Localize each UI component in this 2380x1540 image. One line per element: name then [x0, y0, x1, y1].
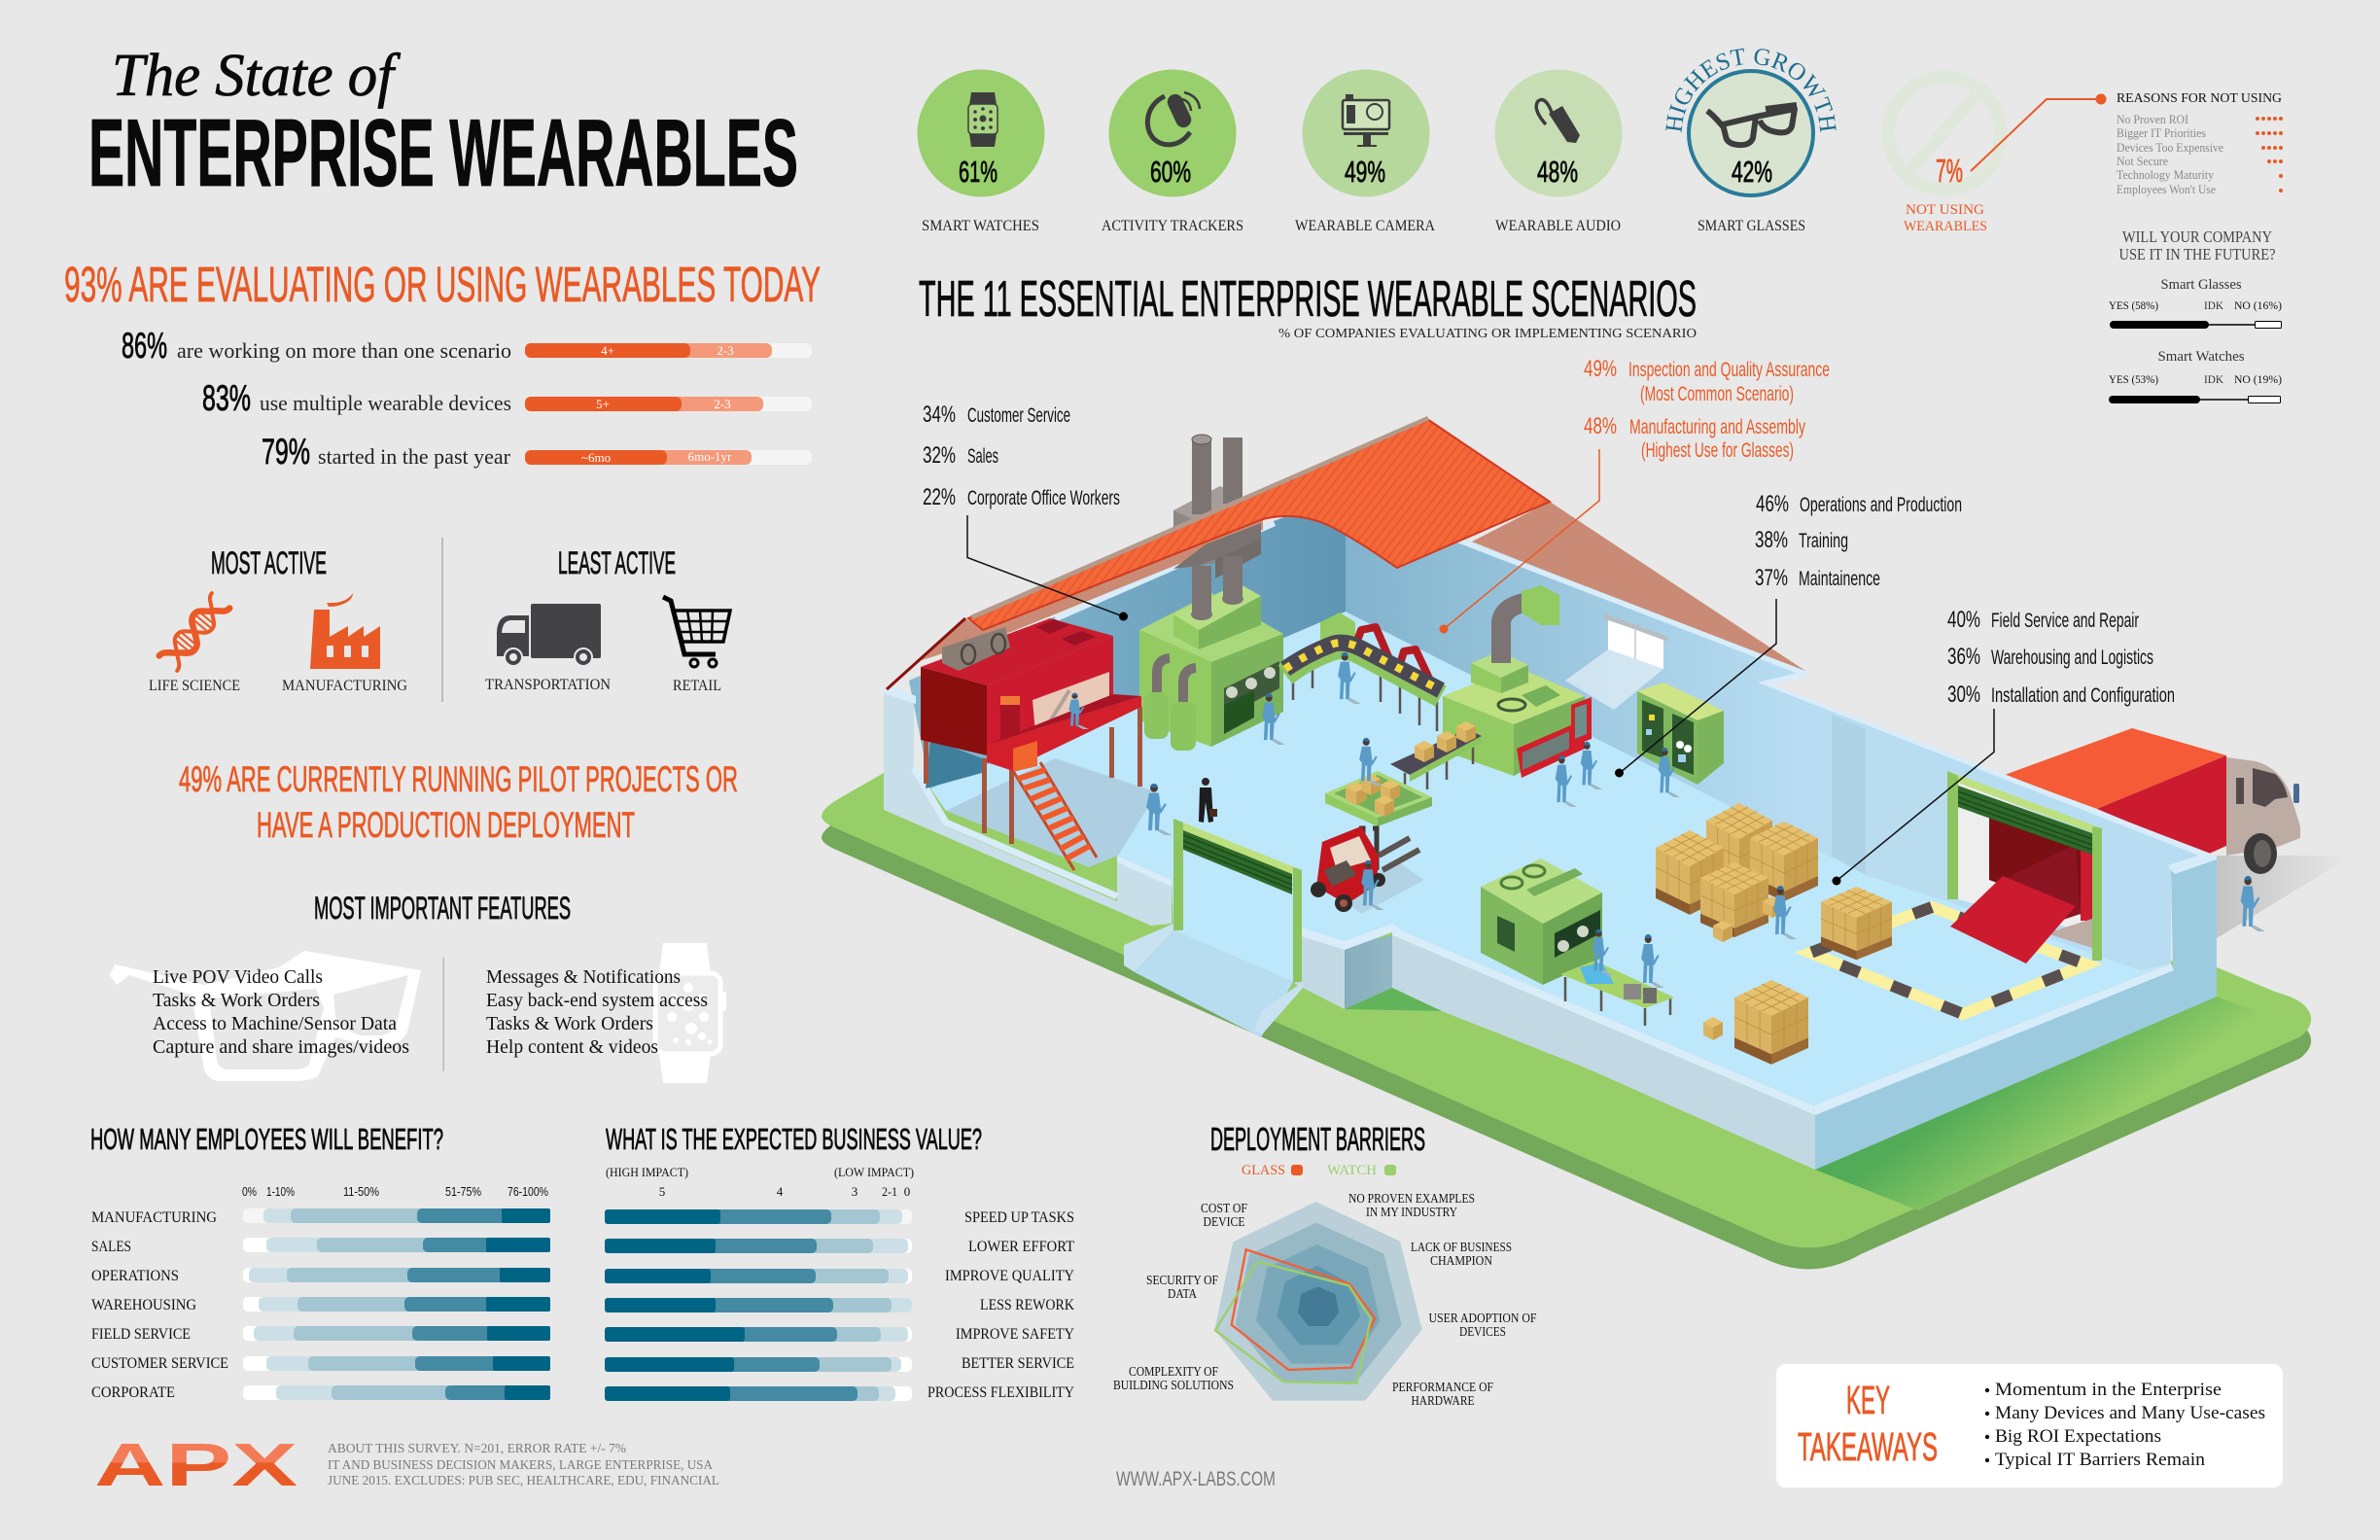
radar labels: CHAMPION	[1430, 1253, 1492, 1268]
back left wall	[909, 494, 1346, 788]
chart: smart glasses future use: YES (58%)	[2109, 298, 2158, 312]
radar labels: COMPLEXITY OF	[1129, 1364, 1218, 1379]
panel: reasons for not using: Not Secure	[2117, 154, 2168, 168]
scenario group: inspection and manufacturing: Manufacturing and Assembly	[1629, 416, 1805, 438]
box tray	[1325, 771, 1432, 826]
device: wearable audio: 48%	[1537, 155, 1578, 189]
right loading door	[1947, 771, 2102, 961]
device: smart watches: 61%	[959, 155, 998, 189]
chart: expected business value: LOWER EFFORT	[968, 1239, 1074, 1255]
panel: reasons for not using: Bigger IT Priorities	[2117, 125, 2206, 140]
scenario group: operations training maintenance: 37%	[1755, 565, 1788, 591]
chart: smart glasses future use: NO (16%)	[2234, 298, 2282, 312]
floor	[930, 612, 2171, 1105]
exhaust pipes and collar	[1173, 435, 1261, 578]
scenario group: field warehousing installation: Field Service and Repair	[1991, 610, 2139, 632]
chart: expected business value: (LOW IMPACT)	[834, 1165, 914, 1179]
machine 2	[1443, 585, 1592, 778]
red roof edge	[887, 618, 965, 689]
small conveyor with boxes	[1390, 721, 1482, 799]
chart: smart glasses future use: Smart Glasses	[2160, 277, 2242, 293]
panel: key takeaways: TAKEAWAYS	[1798, 1424, 1938, 1469]
orange staircase	[1013, 741, 1097, 870]
chart: smart watches future use	[2109, 349, 2282, 403]
scenario group: inspection and manufacturing: (Most Common Scenario)	[1640, 383, 1794, 405]
scenario group: operations training maintenance	[1615, 491, 1962, 778]
bars: employees	[243, 1208, 550, 1400]
scenario group: inspection and manufacturing: (Highest Use for Glasses)	[1641, 439, 1794, 462]
panel: key takeaways: Typical IT Barriers Remain	[1995, 1450, 2206, 1470]
device: activity trackers: ACTIVITY TRACKERS	[1102, 218, 1243, 234]
chart: smart watches future use: IDK	[2204, 372, 2223, 386]
stat: 79 percent: started in the past year	[318, 444, 511, 469]
stack collar lower and pipes	[1173, 523, 1261, 620]
title	[88, 43, 798, 206]
stat: 79 percent: 6mo-1yr	[688, 449, 732, 464]
label: manufacturing: MANUFACTURING	[282, 678, 407, 694]
survey note: ABOUT THIS SURVEY. N=201, ERROR RATE +/- 7%	[328, 1442, 626, 1456]
scenario group: field warehousing installation: 40%	[1947, 607, 1980, 633]
scenario group: operations training maintenance: 46%	[1756, 491, 1789, 517]
chart: expected business value: SPEED UP TASKS	[964, 1209, 1074, 1226]
chart: smart watches future use: YES (53%)	[2109, 372, 2158, 386]
stat: 86 percent: 2-3	[717, 343, 734, 358]
chart: smart glasses future use: IDK	[2204, 298, 2223, 312]
label: retail: RETAIL	[673, 678, 721, 694]
control cabinet	[1637, 682, 1724, 785]
chart: how many employees will benefit: 11-50%	[343, 1184, 379, 1199]
text: watch feature list: Tasks & Work Orders	[486, 1013, 653, 1034]
chart: expected business value: WHAT IS THE EXPECTED BUSINESS VALUE?	[606, 1122, 982, 1156]
chart: how many employees will benefit: OPERATIONS	[91, 1268, 179, 1284]
loading ramp	[1124, 924, 1303, 1037]
chart: how many employees will benefit: CUSTOMER SERVICE	[91, 1355, 228, 1372]
chart: how many employees will benefit: HOW MANY EMPLOYEES WILL BENEFIT?	[90, 1122, 443, 1156]
heading: 93 percent evaluating: 93% ARE EVALUATING OR USING WEARABLES TODAY	[64, 257, 821, 312]
device: activity trackers: 60%	[1150, 155, 1191, 189]
factory roof	[968, 419, 1550, 630]
icon: factory	[310, 593, 380, 669]
conveyor with legs	[1285, 643, 1441, 731]
legend: glass and watch: GLASS	[1242, 1163, 1285, 1178]
device: wearable camera: WEARABLE CAMERA	[1295, 218, 1436, 234]
device: not using wearables: WEARABLES	[1904, 219, 1987, 234]
chart: expected business value: 2-1	[882, 1184, 897, 1199]
chart: expected business value: 5	[659, 1184, 665, 1199]
heading: pilot projects: 49% ARE CURRENTLY RUNNING PILOT PROJECTS OR	[179, 759, 738, 799]
icon: shopping cart	[663, 597, 730, 667]
radar labels: SECURITY OF	[1146, 1273, 1218, 1287]
stat: 83 percent: use multiple wearable devices	[260, 391, 511, 415]
title: The State of	[112, 43, 402, 109]
panel: most active industries: MOST ACTIVE	[211, 545, 327, 580]
work table	[1560, 961, 1674, 1026]
brown roof underside	[887, 502, 1805, 689]
device: smart watches	[918, 70, 1044, 234]
truck shadow on ground	[2217, 856, 2353, 938]
radar polygons	[1214, 1202, 1422, 1401]
scenario group: customer service sales corporate: 32%	[923, 442, 956, 469]
stat: 79 percent	[262, 432, 812, 472]
chart: deployment barriers radar: DEPLOYMENT BARRIERS	[1210, 1121, 1425, 1157]
adoption stat rows with progress bars	[122, 326, 812, 472]
scenario group: field warehousing installation: 30%	[1947, 682, 1980, 708]
website url: WWW.APX-LABS.COM	[1116, 1468, 1276, 1490]
side wing wall	[884, 686, 1172, 926]
panel: least active industries	[485, 545, 730, 694]
chart: how many employees will benefit: 76-100%	[508, 1184, 548, 1199]
text: watch feature list: Help content & videos	[486, 1036, 658, 1058]
chart: expected business value: IMPROVE SAFETY	[956, 1326, 1074, 1343]
device: wearable camera: 49%	[1345, 155, 1385, 189]
stat: 83 percent: 83%	[202, 378, 251, 418]
heading: pilot projects	[179, 759, 738, 845]
left loading door	[1173, 819, 1302, 982]
illustration: isometric factory	[822, 416, 2353, 1269]
back right wall	[1346, 494, 2216, 970]
scenario group: inspection and manufacturing: 49%	[1584, 356, 1617, 382]
front left wall exterior	[1295, 924, 1815, 1170]
label: transportation: TRANSPORTATION	[485, 677, 611, 693]
bars: business value	[605, 1209, 912, 1401]
text: glasses feature list: Live POV Video Calls	[153, 966, 323, 988]
pallet stacks	[1656, 803, 1892, 1065]
radar labels: DATA	[1168, 1286, 1197, 1301]
radar labels	[1113, 1191, 1537, 1408]
radar labels: COST OF	[1201, 1201, 1247, 1215]
panel: reasons for not using: Technology Maturity	[2117, 167, 2214, 182]
chart: how many employees will benefit: 51-75%	[445, 1184, 481, 1199]
green machine 1	[1139, 579, 1283, 751]
panel: reasons for not using: Devices Too Expensive	[2117, 140, 2223, 155]
device: smart glasses: 42%	[1732, 155, 1772, 189]
device: not using wearables: NOT USING	[1906, 202, 1984, 218]
panel: reasons for not using	[2117, 90, 2283, 196]
stat: 79 percent: 79%	[262, 432, 310, 472]
scenario group: customer service sales corporate: 34%	[923, 402, 956, 428]
icon: truck	[497, 604, 601, 666]
chart: how many employees will benefit: MANUFACTURING	[91, 1209, 217, 1226]
legend: glass and watch: WATCH	[1327, 1163, 1377, 1178]
survey note: JUNE 2015. EXCLUDES: PUB SEC, HEALTHCARE, EDU, FINANCIAL	[328, 1474, 719, 1488]
chart: expected business value	[605, 1122, 1074, 1401]
hopper	[1320, 612, 1355, 653]
title: ENTERPRISE WEARABLES	[88, 99, 798, 206]
workers	[1068, 652, 2265, 988]
chart: how many employees will benefit: 0%	[242, 1184, 257, 1199]
legend: glass and watch	[1242, 1163, 1396, 1178]
hazard floor markings	[1810, 907, 2086, 1014]
scenario group: field warehousing installation: Installation and Configuration	[1991, 684, 2175, 707]
survey note: IT AND BUSINESS DECISION MAKERS, LARGE ENTERPRISE, USA	[328, 1458, 714, 1473]
red truck ramp	[1950, 876, 2076, 963]
radar labels: IN MY INDUSTRY	[1366, 1205, 1457, 1219]
heading: pilot projects: HAVE A PRODUCTION DEPLOYMENT	[257, 805, 635, 845]
chart: expected business value: (HIGH IMPACT)	[606, 1165, 688, 1179]
panel: key takeaways	[1776, 1364, 2283, 1488]
panel: least active industries: LEAST ACTIVE	[558, 545, 676, 580]
text: watch feature list: Messages & Notifications	[486, 966, 681, 988]
under-mezzanine shadow	[946, 758, 1157, 867]
chart: expected business value: 0	[904, 1184, 910, 1199]
radar labels: PERFORMANCE OF	[1392, 1380, 1493, 1394]
label: life science: LIFE SCIENCE	[149, 678, 240, 694]
scenario group: inspection and manufacturing	[1439, 356, 1830, 634]
chart: expected business value: 4	[777, 1184, 784, 1199]
device: not using wearables	[1888, 77, 2001, 234]
roof ridge strip	[970, 416, 1429, 619]
heading: 11 essential scenarios: THE 11 ESSENTIAL ENTERPRISE WEARABLE SCENARIOS	[919, 271, 1697, 328]
red mezzanine office	[921, 618, 1142, 844]
stat: 86 percent: 86%	[122, 326, 167, 366]
chart: smart watches future use: Smart Watches	[2158, 349, 2245, 365]
delivery truck	[2005, 728, 2300, 874]
scenario group: operations training maintenance: Training	[1799, 530, 1848, 552]
device: wearable camera	[1295, 70, 1436, 234]
survey note	[328, 1442, 719, 1488]
green base slab	[822, 773, 2311, 1269]
stat: 79 percent: ~6mo	[581, 450, 611, 465]
panel: reasons for not using: REASONS FOR NOT USING	[2117, 90, 2282, 105]
front right wall exterior	[1813, 856, 2217, 1170]
scenario group: inspection and manufacturing: Inspection and Quality Assurance	[1628, 359, 1830, 381]
panel: glasses features	[110, 951, 421, 1081]
chart: how many employees will benefit: 1-10%	[266, 1184, 295, 1199]
chart: smart watches future use: NO (19%)	[2234, 372, 2282, 386]
divider	[443, 958, 444, 1071]
heading: 11 essential scenarios	[919, 271, 1697, 341]
scenario group: operations training maintenance: Maintainence	[1799, 568, 1880, 590]
panel: future use: USE IT IN THE FUTURE?	[2119, 245, 2275, 263]
device: wearable audio	[1495, 70, 1622, 234]
scenario group: customer service sales corporate: Sales	[967, 445, 998, 468]
device: activity trackers	[1102, 70, 1243, 234]
chart: how many employees will benefit: WAREHOUSING	[91, 1297, 196, 1313]
chart: expected business value: IMPROVE QUALITY	[945, 1268, 1074, 1284]
forklift	[1311, 826, 1424, 914]
chart: smart glasses future use	[2109, 277, 2282, 329]
panel: future use: WILL YOUR COMPANY	[2122, 228, 2272, 246]
text: watch feature list: Easy back-end system access	[486, 990, 708, 1011]
factory window	[1565, 613, 1668, 710]
panel: reasons for not using: No Proven ROI	[2117, 112, 2188, 126]
chart: how many employees will benefit: FIELD SERVICE	[91, 1326, 191, 1343]
panel: future use	[2109, 228, 2282, 403]
logo: APX: APX	[94, 1432, 298, 1499]
device: not using wearables: 7%	[1936, 153, 1963, 189]
panel: device adoption circles	[918, 49, 2008, 234]
scenario group: inspection and manufacturing: 48%	[1584, 413, 1617, 439]
heading: 11 essential scenarios: % OF COMPANIES EVALUATING OR IMPLEMENTING SCENARIO	[1278, 327, 1697, 341]
text: glasses feature list: Access to Machine/Sensor Data	[153, 1013, 397, 1034]
device: smart glasses	[1665, 49, 1837, 234]
stat: 86 percent	[122, 326, 812, 366]
icon: white watch	[655, 943, 726, 1083]
panel: reasons for not using: Employees Won't Use	[2117, 182, 2216, 196]
chart: how many employees will benefit	[90, 1122, 550, 1401]
stat: 83 percent	[202, 378, 812, 418]
panel: key takeaways: KEY	[1846, 1378, 1890, 1422]
radar labels: HARDWARE	[1412, 1393, 1474, 1408]
scenario group: customer service sales corporate	[923, 402, 1128, 620]
robot arms	[1351, 627, 1431, 682]
panel: key takeaways: Big ROI Expectations	[1995, 1426, 2161, 1447]
text: glasses feature list: Tasks & Work Orders	[153, 990, 320, 1011]
panel: key takeaways: Many Devices and Many Use-cases	[1995, 1403, 2265, 1423]
stat: 86 percent: are working on more than one scenario	[177, 338, 511, 363]
radar labels: NO PROVEN EXAMPLES	[1348, 1191, 1475, 1206]
chart: expected business value: 3	[852, 1184, 858, 1199]
chart: expected business value: BETTER SERVICE	[962, 1355, 1074, 1372]
scenario group: operations training maintenance: Operations and Production	[1800, 494, 1962, 516]
scenario group: customer service sales corporate: 22%	[923, 484, 956, 510]
device: wearable audio: WEARABLE AUDIO	[1495, 218, 1621, 234]
chart: deployment barriers radar	[1113, 1121, 1537, 1408]
wall caps and pillar	[1055, 494, 2216, 901]
chart: how many employees will benefit: CORPORATE	[91, 1384, 175, 1401]
panel: watch features	[486, 943, 726, 1083]
scenario group: field warehousing installation: Warehousing and Logistics	[1991, 647, 2153, 669]
radar labels: DEVICES	[1459, 1324, 1506, 1339]
device: smart glasses: SMART GLASSES	[1698, 218, 1805, 234]
radar labels: DEVICE	[1204, 1214, 1244, 1229]
scenario group: customer service sales corporate: Customer Service	[967, 404, 1070, 427]
scenario group: customer service sales corporate: Corporate Office Workers	[967, 487, 1120, 509]
panel: key takeaways: Momentum in the Enterprise	[1995, 1380, 2222, 1400]
text: glasses feature list: Capture and share images/videos	[153, 1036, 409, 1058]
text: watch feature list	[486, 966, 708, 1058]
stat: 83 percent: 5+	[596, 397, 610, 411]
chart: expected business value: PROCESS FLEXIBILITY	[928, 1384, 1074, 1401]
radar labels: LACK OF BUSINESS	[1411, 1240, 1512, 1254]
device: smart glasses: HIGHEST GROWTH	[1665, 49, 1837, 132]
radar labels: USER ADOPTION OF	[1429, 1311, 1537, 1325]
divider	[441, 538, 443, 702]
text: glasses feature list	[153, 966, 409, 1058]
chart: expected business value: LESS REWORK	[980, 1297, 1074, 1313]
scenario group: field warehousing installation	[1832, 607, 2175, 885]
radar labels: BUILDING SOLUTIONS	[1113, 1378, 1234, 1392]
icon: white glasses	[110, 951, 421, 1081]
stat: 86 percent: 4+	[601, 343, 614, 358]
device: smart watches: SMART WATCHES	[922, 218, 1039, 234]
panel: most active industries	[149, 545, 407, 694]
machine 3	[1481, 858, 1602, 985]
scenario group: field warehousing installation: 36%	[1947, 644, 1980, 670]
chart: how many employees will benefit: SALES	[91, 1239, 131, 1255]
stat: 83 percent: 2-3	[714, 397, 731, 411]
scenario group: operations training maintenance: 38%	[1755, 527, 1788, 553]
heading: most important features: MOST IMPORTANT FEATURES	[314, 891, 571, 926]
icon: dna	[159, 593, 229, 671]
callout line to reasons	[1971, 93, 2106, 171]
